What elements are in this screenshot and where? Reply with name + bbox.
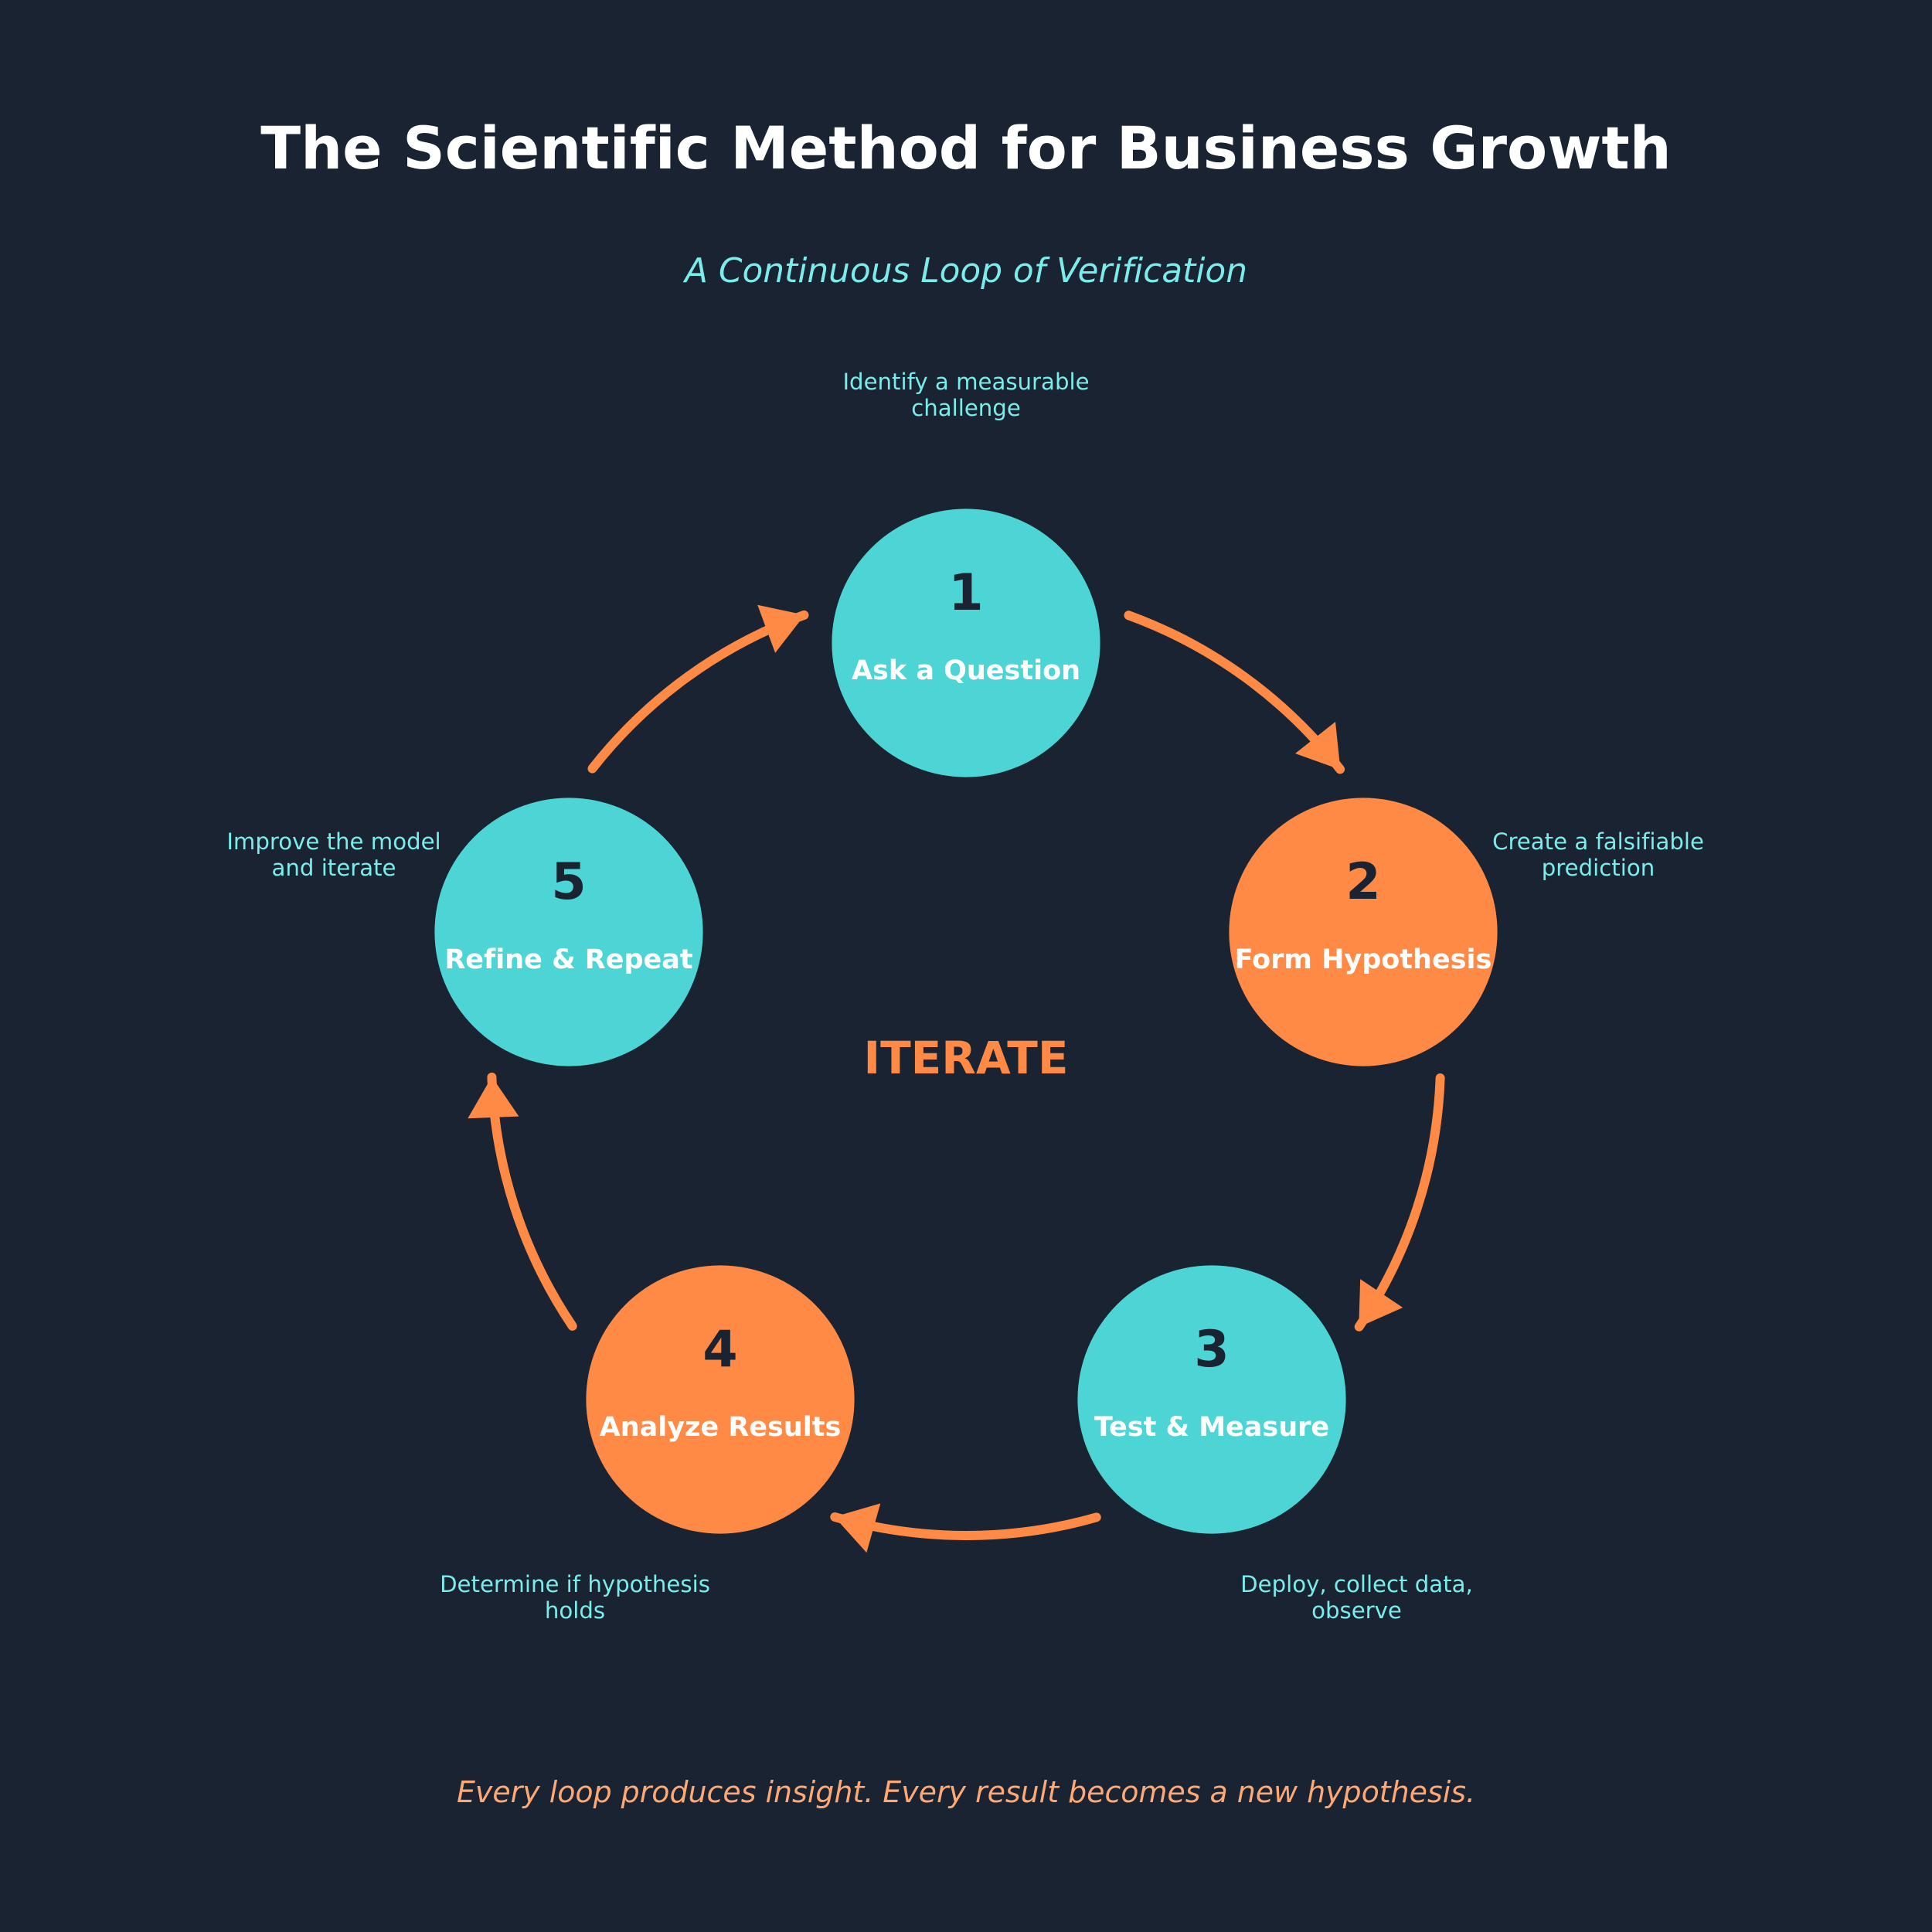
center label: ITERATE: ITERATE <box>864 1032 1068 1084</box>
step 2: Form Hypothesis <box>1229 798 1498 1066</box>
subtitle: A Continuous Loop of Verification <box>682 251 1247 291</box>
description: step 4: holds <box>545 1597 605 1624</box>
step 1: Ask a Question: 1 <box>948 564 984 622</box>
description: step 4: Determine if hypothesis <box>440 1571 710 1597</box>
step 3: Test & Measure <box>1077 1265 1346 1534</box>
arrow: step 3 to step 4 <box>835 1393 1097 1641</box>
step 4: Analyze Results <box>586 1265 855 1534</box>
step 5: Refine & Repeat <box>434 798 703 1066</box>
arrow: step 4 to step 5 <box>401 1077 663 1326</box>
arrow: step 5 to step 1 <box>592 567 804 816</box>
arrow: step 1 to step 2 <box>1128 615 1340 770</box>
arrow: step 2 to step 3 <box>1294 1078 1505 1327</box>
step 3: Test & Measure: Test & Measure <box>1094 1412 1329 1443</box>
description: step 2: Create a falsifiable <box>1492 828 1704 855</box>
step 5: Refine & Repeat: 5 <box>551 853 587 911</box>
description: step 3: observe <box>1311 1597 1402 1624</box>
description: step 5: and iterate <box>272 855 396 881</box>
step 1: Ask a Question <box>832 509 1100 777</box>
step 4: Analyze Results: 4 <box>702 1321 738 1379</box>
description: step 2: prediction <box>1542 855 1655 881</box>
footer tagline: Every loop produces insight. Every result becomes a new hypothesis. <box>457 1775 1475 1809</box>
description: step 5: Improve the model <box>226 828 441 855</box>
description: step 1: Identify a measurable <box>842 369 1090 395</box>
description: step 1: challenge <box>911 395 1021 421</box>
step 2: Form Hypothesis: 2 <box>1345 853 1381 911</box>
title: The Scientific Method for Business Growth <box>260 114 1672 182</box>
description: step 3: Deploy, collect data, <box>1240 1571 1473 1597</box>
step 5: Refine & Repeat: Refine & Repeat <box>444 944 693 975</box>
step 4: Analyze Results: Analyze Results <box>600 1412 841 1443</box>
step 2: Form Hypothesis: Form Hypothesis <box>1235 944 1492 975</box>
step 1: Ask a Question: Ask a Question <box>852 655 1080 686</box>
step 3: Test & Measure: 3 <box>1194 1321 1230 1379</box>
